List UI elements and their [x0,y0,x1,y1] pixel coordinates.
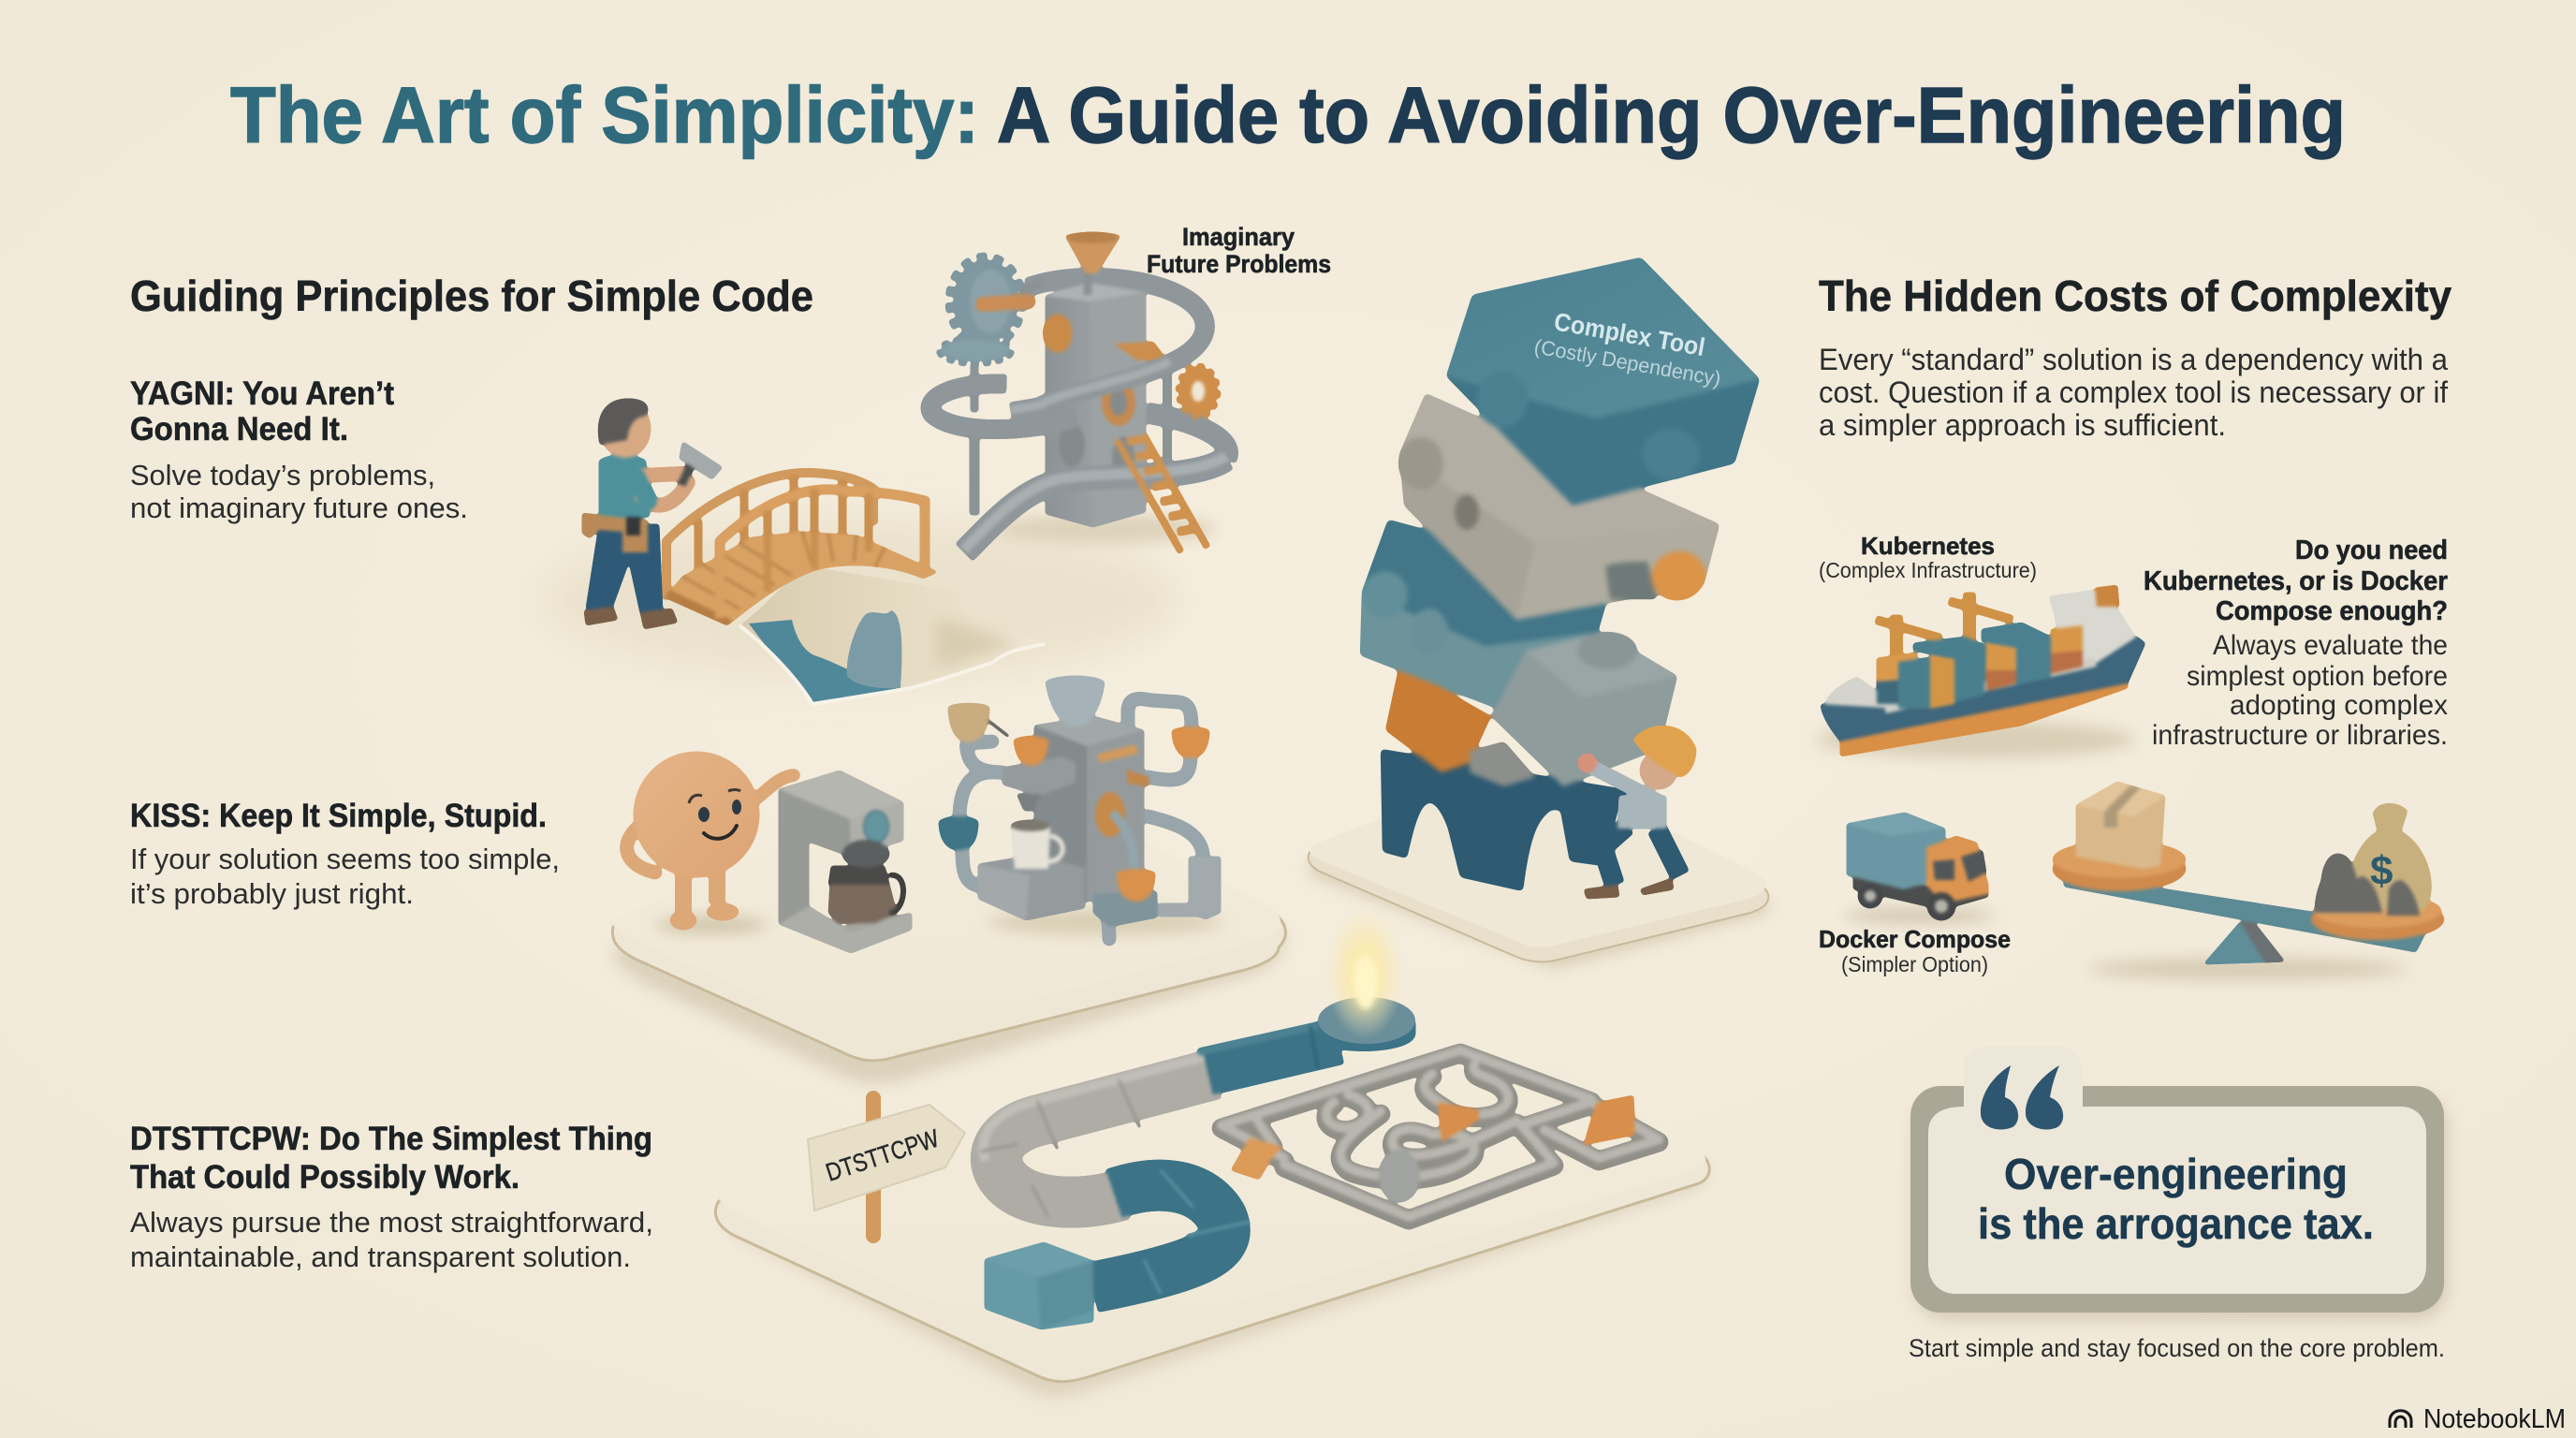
water [749,620,899,704]
brand: NotebookLM: NotebookLM [2423,1404,2566,1434]
deck strip [1883,657,2097,713]
label: imaginary future problems [1147,223,1331,278]
label: kubernetes: (Complex Infrastructure) [1819,558,2037,582]
illustration: egg character [627,752,794,933]
orange block [1385,665,1491,772]
platform: KISS [612,759,1285,1084]
text block: DTSTTCPW [130,1121,653,1273]
title: A Guide to Avoiding Over-Engineering [997,71,2346,159]
left pan with box [2053,846,2186,891]
navy base block [1381,749,1635,891]
start cube [985,1242,1093,1329]
tower [1034,716,1144,902]
text block: YAGNI: not imaginary future ones. [130,492,468,524]
label: kubernetes: Kubernetes [1861,532,1995,560]
containers [1877,653,1917,704]
text block: KISS [130,798,560,910]
text block: kubernetes question: Kubernetes, or is Docker [2144,566,2448,596]
text block: YAGNI: YAGNI: You Aren’t [130,375,394,412]
teal block [1360,520,1613,712]
label: imaginary future problems: Imaginary [1182,223,1295,251]
panel: guiding principles text [130,271,813,1273]
legs [1603,826,1680,885]
pipes [959,698,1203,939]
tower [1046,283,1146,527]
platform: DTSTTCPW [715,1005,1709,1397]
heading: guiding principles: Guiding Principles for Simple Code [130,271,813,320]
grey-blue block [1491,632,1677,786]
rock [847,610,902,688]
illustration: DTSTTCPW signpost [808,1098,965,1236]
complex tool label [1532,307,1722,390]
orange markers [1231,1137,1282,1180]
complex tool label: Complex Tool [1552,307,1707,361]
text block: DTSTTCPW: Always pursue the most straightforward, [130,1206,653,1239]
text block: KISS: it’s probably just right. [130,877,414,910]
machine support post [970,426,979,515]
text block: hidden costs intro: Every “standard” solution is a dependency with a [1819,343,2448,376]
head and hard hat [1640,752,1677,789]
illustration: delivery truck [1844,813,1994,923]
text block: kubernetes question: simplest option before [2187,661,2448,692]
label: imaginary future problems: Future Problems [1147,250,1331,278]
truck box [1847,813,1945,889]
upper teal blocks [1208,1041,1339,1072]
grey block [1399,393,1720,620]
gear and bottom pipes [1095,792,1125,837]
legs [676,866,691,913]
superstructure [2049,590,2137,667]
small box and mug [978,855,1085,920]
illustration: complicated coffee machine [939,676,1222,939]
quote text: is the arrogance tax. [1978,1199,2374,1248]
label: docker compose: Docker Compose [1819,925,2011,953]
text block: YAGNI [130,375,468,524]
white bow [1823,677,1900,712]
illustration: over-engineered marble machine [930,232,1228,552]
arm [1593,768,1657,800]
goal button base [1318,1020,1415,1051]
hammer [681,457,695,485]
text block: KISS: KISS: Keep It Simple, Stupid. [130,798,547,834]
chassis [1853,875,1988,910]
face [689,790,741,839]
arms [642,474,681,476]
text block: DTSTTCPW: DTSTTCPW: Do The Simplest Thing [130,1121,652,1157]
truck cab [1926,836,1988,903]
funnel [1046,676,1105,726]
legs [586,524,663,613]
arms [627,829,655,873]
text block: kubernetes question: Compose enough? [2216,596,2448,626]
sign label: DTSTTCPW [823,1123,943,1187]
grey blocks top [983,1056,1208,1161]
illustration: lit goal button [1318,908,1415,1044]
wheels [1858,884,1882,908]
title: The Art of Simplicity: [230,71,979,159]
text block: DTSTTCPW: maintainable, and transparent solution. [130,1240,631,1273]
teal blocks [1093,1185,1224,1287]
illustration: worker holding tower [1578,726,1696,899]
carafe [828,866,897,923]
torso [599,455,650,521]
text block: hidden costs intro: cost. Question if a complex tool is necessary or if [1819,375,2448,409]
text block: hidden costs intro: a simpler approach is sufficient. [1819,408,2226,442]
right pan with money [2311,899,2444,940]
illustration: container ship [1816,585,2145,758]
text block: hidden costs intro [1819,343,2448,442]
illustration: worker with hammer [582,399,717,629]
funnel [1084,271,1091,295]
label: docker compose: (Simpler Option) [1841,952,1988,976]
complex tool label: (Costly Dependency) [1532,334,1722,390]
label: docker compose [1819,925,2011,976]
heading: hidden costs: The Hidden Costs of Complexity [1819,271,2452,320]
text block: YAGNI: Gonna Need It. [130,411,348,448]
quote text [1978,1150,2374,1248]
text block: kubernetes question: infrastructure or libraries. [2152,720,2448,751]
cranes [1896,593,1969,667]
fulcrum [2203,922,2285,964]
hull keel [1840,676,2128,756]
caption: start simple: Start simple and stay focused on the core problem. [1909,1334,2445,1362]
arm platform [1003,756,1076,796]
top teal block [1446,257,1760,506]
orange gears [1045,315,1071,351]
text block: kubernetes question: adopting complex [2230,690,2448,721]
body [634,752,759,877]
front ramps [1011,363,1170,412]
label: kubernetes [1819,532,2037,582]
quote text: Over-engineering [2004,1150,2348,1198]
tool belt [582,513,648,552]
text block: YAGNI: Solve today’s problems, [130,459,435,492]
illustration: tangled maze [1222,1050,1659,1220]
grey blocks side [996,1074,1215,1202]
torso [1617,796,1666,829]
icon: notebooklm arcs [2390,1411,2411,1428]
cups [1014,736,1048,766]
illustration: leaning tower of blocks [1360,257,1760,891]
beam [2064,873,2427,952]
button [864,811,888,843]
text block: kubernetes question: Always evaluate the [2213,630,2448,661]
lower gear [940,339,1011,363]
illustration: simple coffee maker [779,770,912,953]
back ramp [1028,277,1205,363]
title [230,71,2346,159]
illustration: balance scale [2053,782,2444,980]
small grey block [1470,741,1535,786]
dollar sign: $ [2370,848,2393,894]
pit shadow [936,618,1020,667]
ladder [1117,435,1208,552]
head [600,400,651,458]
illustration: simple path [981,1020,1415,1329]
illustration: gorge [543,520,1179,704]
text block: kubernetes question: Do you need [2295,536,2448,565]
hull [1821,637,2145,741]
text block: DTSTTCPW: That Could Possibly Work. [130,1159,520,1196]
callout: quote [1910,1046,2448,1320]
illustration: wooden bridge [665,473,938,625]
platform: block tower [1309,772,1769,969]
text block: KISS: If your solution seems too simple, [130,843,560,875]
text block: kubernetes question [2144,536,2448,751]
icon: quotation marks [1981,1065,2063,1129]
grey oval [1379,1150,1420,1202]
orange stud [1646,545,1711,607]
big gear [951,258,1020,345]
